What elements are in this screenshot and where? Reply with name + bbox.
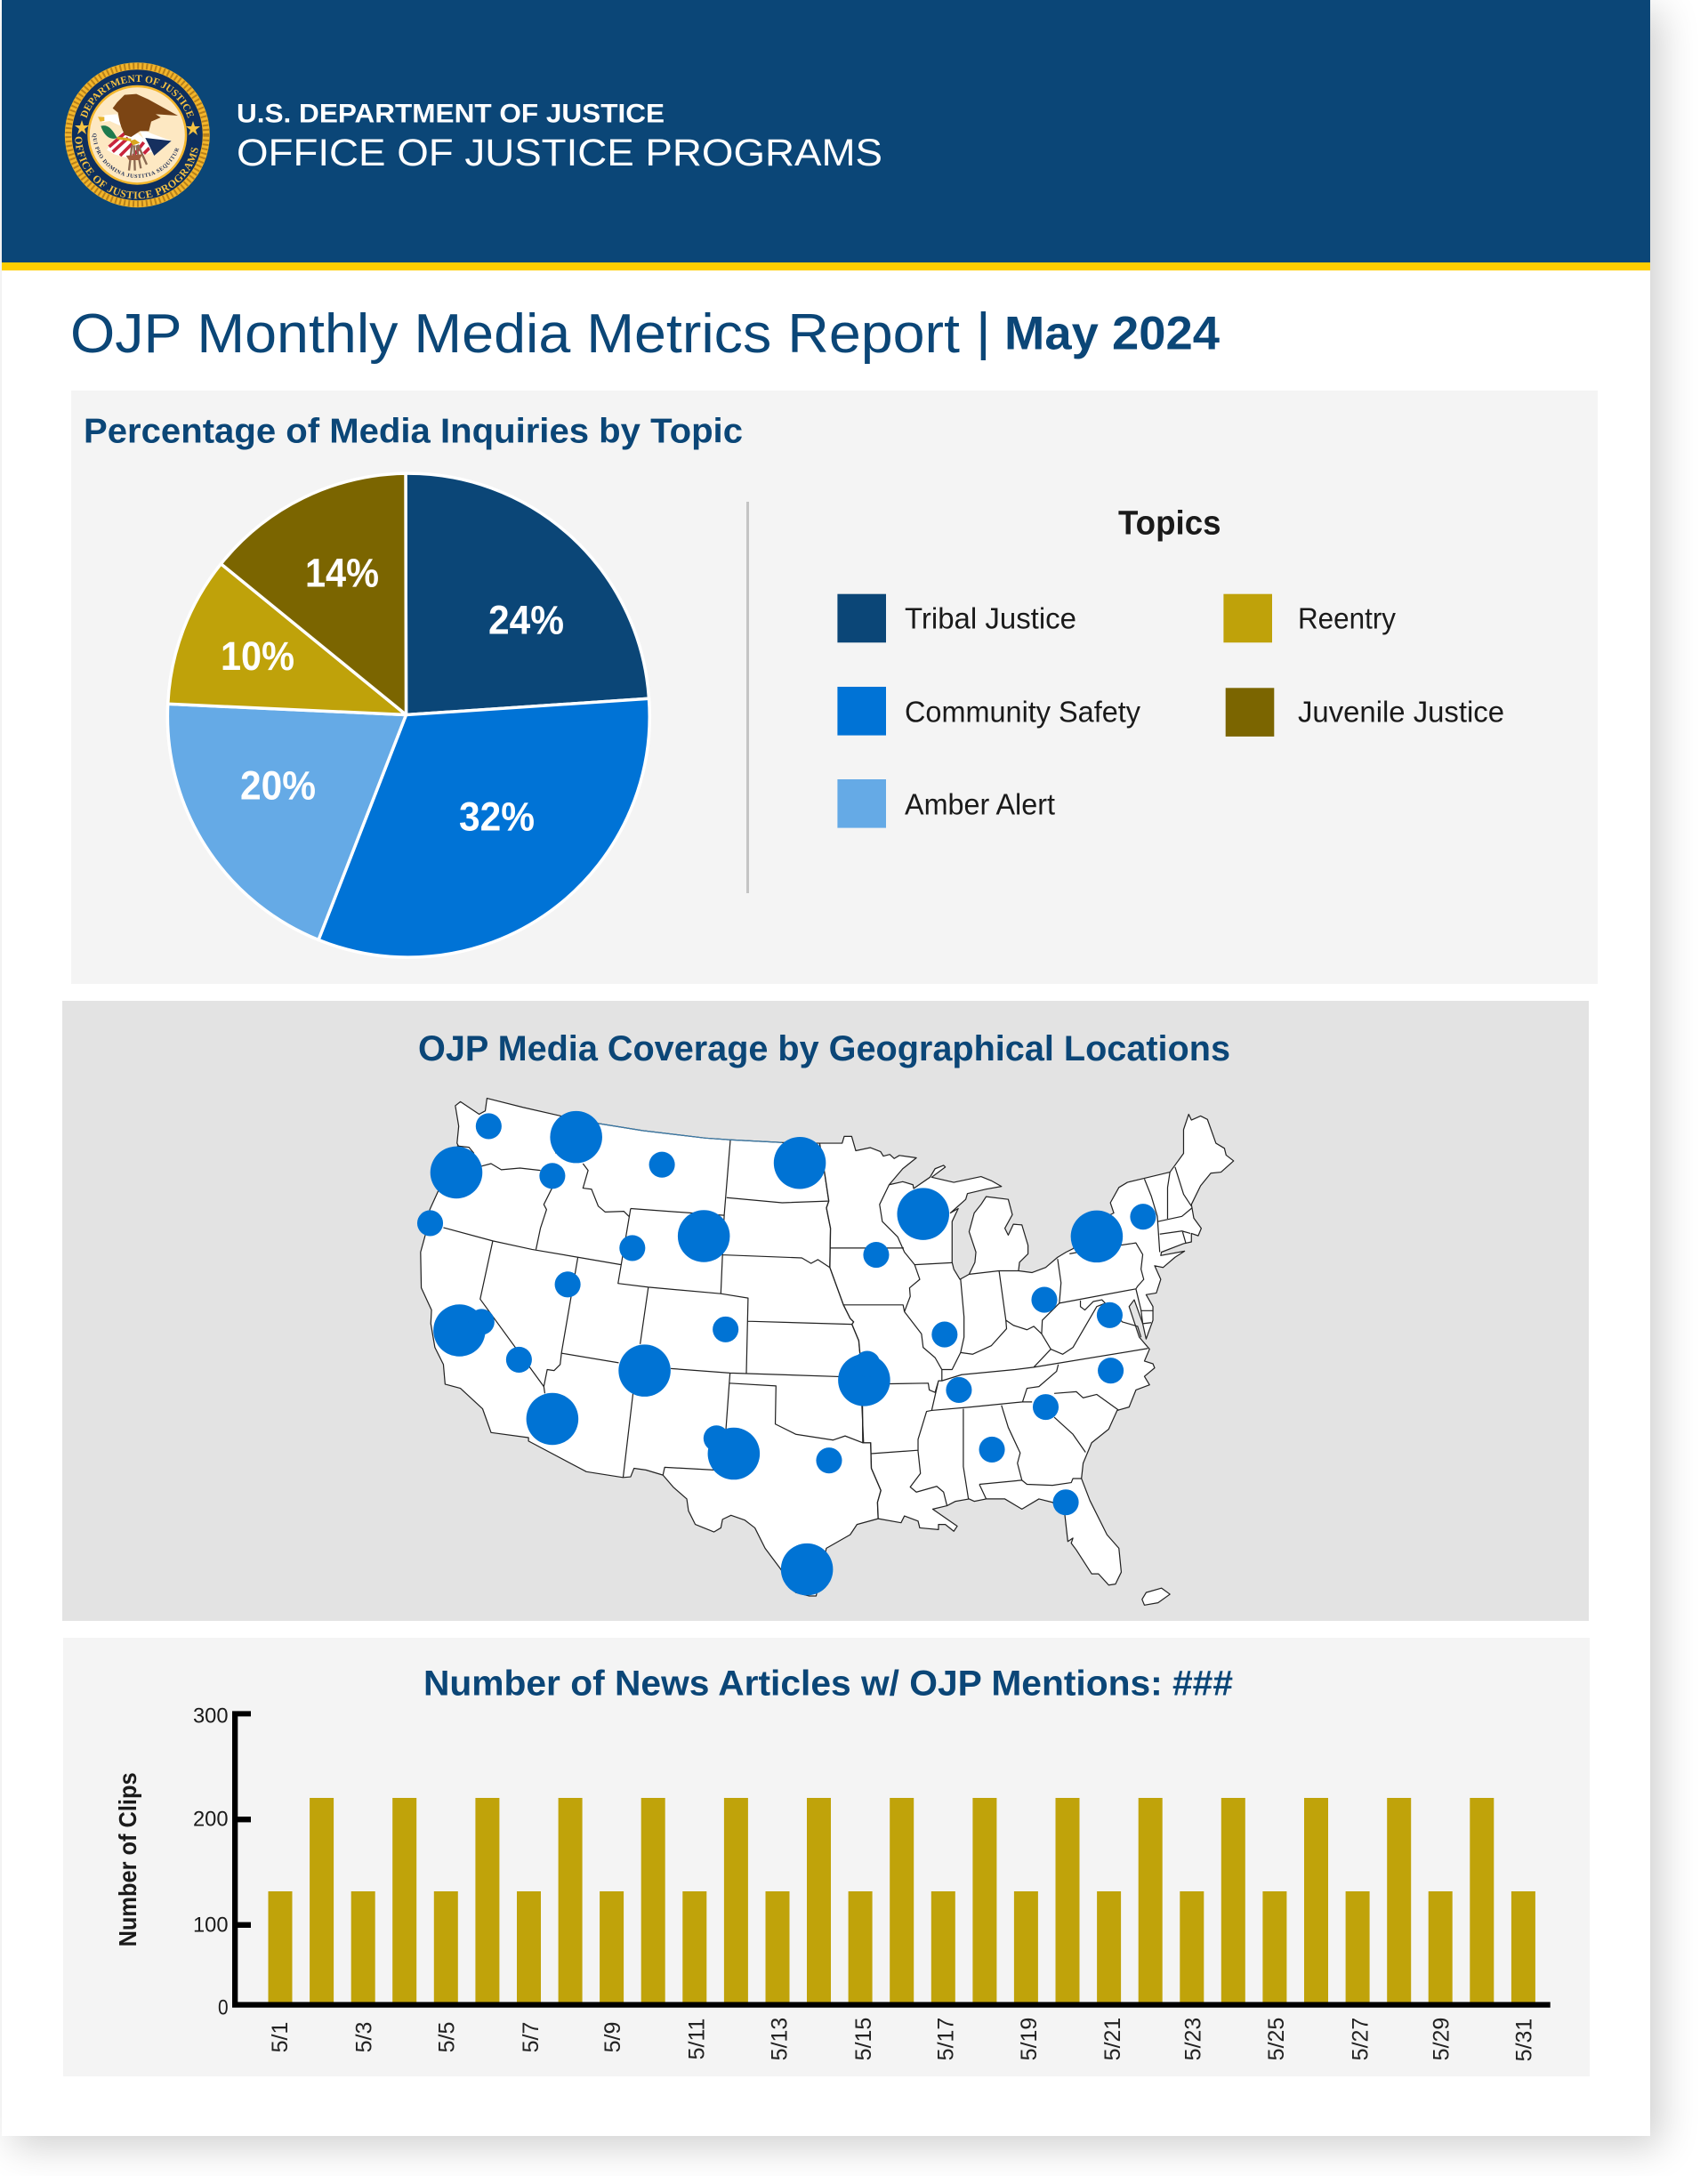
x-axis date labels: 5/19 [1017,2018,1042,2060]
x-axis date labels: 5/3 [351,2022,376,2052]
western states [421,1099,881,1596]
x-axis date labels: 5/29 [1430,2018,1454,2060]
x-axis date labels: 5/25 [1264,2018,1289,2060]
header banner [2,0,1650,270]
icon: Office of Justice Programs seal: DEPARTMENT OF JUSTICE [80,75,194,118]
icon: Office of Justice Programs seal: QUI PRO DOMINA JUSTITIA SEQUITUR [92,133,180,178]
agency name: U.S. DEPARTMENT OF JUSTICE [237,100,665,129]
bars [269,1798,1535,2003]
coverage bubbles [417,1111,1156,1595]
heading: map: OJP Media Coverage by Geographical Locations [418,1029,1230,1068]
x-axis date labels: 5/31 [1512,2019,1537,2061]
eastern states [819,1115,1234,1605]
y-axis labels [193,1705,229,2019]
legend: topics [837,505,1504,828]
x-axis date labels: 5/23 [1181,2018,1206,2060]
legend: topics: Amber Alert [905,788,1055,821]
y-axis title: Number of Clips [114,1772,141,1946]
panel: news articles bar chart [63,1638,1590,2076]
legend: topics: Topics [1118,505,1221,543]
icon: Office of Justice Programs seal: OFFICE OF JUSTICE PROGRAMS [75,137,198,199]
panel: percentage of media inquiries by topic [71,391,1598,984]
legend: topics: Tribal Justice [905,602,1076,635]
agency name: OFFICE OF JUSTICE PROGRAMS [237,132,882,174]
x-axis date labels: 5/21 [1100,2018,1125,2060]
y-axis labels: 100 [193,1914,228,1938]
x-axis date labels: 5/9 [600,2022,625,2052]
x-axis date labels [268,2018,1537,2061]
x-axis date labels: 5/17 [934,2018,959,2060]
pie percentage labels: 10% [221,633,294,679]
panel: geographic coverage map [62,1001,1589,1621]
heading: pie chart: Percentage of Media Inquiries by Topic [84,413,743,451]
chart axes [232,1711,1551,2008]
x-axis date labels: 5/1 [268,2022,293,2052]
pie chart [167,473,649,957]
legend: topics: Juvenile Justice [1298,696,1504,729]
legend: topics: Community Safety [905,696,1140,729]
pie percentage labels [221,550,564,840]
title: May 2024 [1004,308,1221,360]
x-axis date labels: 5/15 [851,2018,876,2060]
y-axis labels: 200 [193,1808,228,1832]
title: OJP Monthly Media Metrics Report [70,303,960,365]
pie percentage labels: 32% [459,794,535,840]
heading: bar chart: Number of News Articles w/ OJP Mentions: ### [423,1664,1233,1703]
x-axis date labels: 5/5 [434,2022,459,2052]
x-axis date labels: 5/11 [685,2019,710,2059]
y-axis labels: 300 [193,1705,228,1729]
icon: Office of Justice Programs seal [64,62,210,208]
y-axis labels: 0 [218,1995,229,2019]
legend: topics: Reentry [1298,602,1396,635]
map of the United States with coverage bubbles [417,1099,1234,1605]
agency name [237,100,882,174]
x-axis date labels: 5/27 [1349,2018,1374,2060]
x-axis date labels: 5/7 [519,2022,544,2052]
pie percentage labels: 24% [488,598,564,643]
pie percentage labels: 14% [305,550,379,596]
pie percentage labels: 20% [240,763,316,808]
x-axis date labels: 5/13 [768,2018,793,2060]
